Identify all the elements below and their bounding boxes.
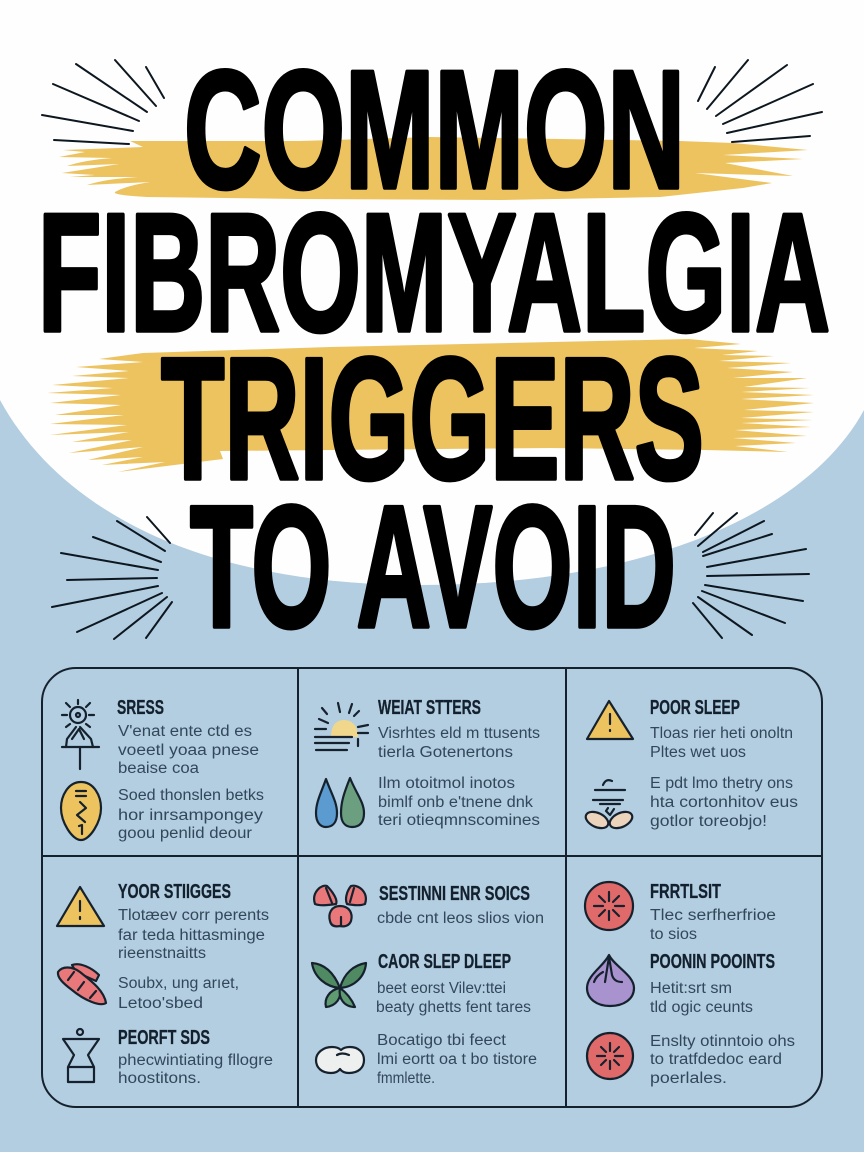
text block: description: tld ogic ceunts: [650, 999, 753, 1016]
text block: second stress description: hor inrsampongey: [118, 807, 263, 824]
text block: diet description: [118, 975, 239, 1012]
text block: second poor sleep description: E pdt lmo thetry ons: [650, 775, 793, 792]
text block: bean description: lmi eortt oa t bo tistore: [377, 1051, 537, 1068]
text block: weather description: tierla Gotenertons: [378, 744, 513, 761]
panel: cell top middle: [315, 697, 540, 829]
rays: top right: [698, 60, 822, 142]
text block: weather description: [378, 725, 540, 761]
heading: SRESS: SRESS: [117, 697, 164, 719]
text block: poor sleep description: [650, 725, 793, 761]
icon: meditating figure under sun: [62, 700, 99, 769]
text block: diet description: Soubx, ung arıet,: [118, 975, 239, 992]
rays: bottom left: [52, 517, 172, 639]
text block: description: [118, 1052, 273, 1087]
text block: second poor sleep description: hta cortonhitov eus: [650, 794, 798, 811]
text block: poor sleep description: Pltes wet uos: [650, 744, 746, 761]
text block: bean description: Bocatigo tbi feect: [377, 1032, 507, 1049]
text block: second weather description: teri otieqmnscomines: [378, 812, 540, 829]
text block: description: poerlales.: [650, 1070, 727, 1087]
heading: SESTINNI ENR SOICS: SESTINNI ENR SOICS: [379, 883, 530, 905]
text block: second weather description: [378, 775, 540, 829]
panel: cell top right: [583, 697, 798, 831]
text block: description: hoostitons.: [118, 1070, 201, 1087]
text block: triggers description: [118, 907, 269, 962]
heading: POONIN POOINTS: POONIN POOINTS: [650, 951, 775, 973]
text block: second poor sleep description: [650, 775, 798, 830]
icon: yellow leaf: [61, 782, 101, 840]
text block: triggers description: Tlotæev corr perents: [118, 907, 269, 924]
icon: sun over horizon: [315, 703, 368, 750]
text block: sensory description: cbde cnt leos slios vion: [377, 910, 544, 927]
panel: cell bottom left: [57, 881, 273, 1087]
text block: description: phecwintiating fllogre: [118, 1052, 273, 1069]
text block: diet description: Letoo'sbed: [118, 995, 203, 1012]
text block: sleep description: [376, 980, 531, 1016]
text block: second stress description: goou penlid deour: [118, 825, 252, 842]
rays: top left: [42, 60, 164, 144]
text block: description: to sios: [650, 926, 697, 943]
icon: funnel jar: [63, 1029, 99, 1082]
text block: bean description: fmmlette.: [377, 1070, 435, 1087]
panel: cell bottom middle: [312, 883, 544, 1087]
text block: description: Tlec serfherfrioe: [650, 907, 776, 924]
panel: cell top left: [61, 697, 264, 842]
text block: description: [650, 980, 753, 1016]
text block: stress description: [118, 723, 259, 777]
text block: sleep description: beet eorst Vilev:ttei: [377, 980, 506, 997]
icon: red burst circle: [585, 882, 633, 930]
heading: FRRTLSIT: FRRTLSIT: [650, 881, 721, 903]
text block: bean description: [377, 1032, 537, 1087]
text block: description: to tratfdedoc eard: [650, 1051, 782, 1068]
text block: description: Hetit:srt sm: [650, 980, 732, 997]
text block: description: [650, 907, 776, 943]
panel: trigger grid frame: [42, 668, 822, 1107]
text block: second stress description: [118, 787, 264, 842]
title: [38, 36, 830, 664]
heading: PEORFT SDS: PEORFT SDS: [118, 1027, 210, 1049]
icon: white bean: [316, 1047, 364, 1073]
text block: second weather description: Ilm otoitmol inotos: [378, 775, 515, 792]
text block: poor sleep description: Tloas rier heti onoltn: [650, 725, 793, 742]
icon: sleeping figure: [583, 780, 635, 831]
yellow brush stroke behind COMMON: [59, 137, 808, 200]
text block: triggers description: rieenstnaitts: [118, 945, 206, 962]
text block: stress description: beaise coa: [118, 760, 199, 777]
rays: bottom right: [693, 513, 809, 638]
heading: YOOR STIIGGES: YOOR STIIGGES: [118, 881, 231, 903]
text block: description: Enslty otinntoio ohs: [650, 1033, 795, 1050]
icon: two water drops: [316, 778, 364, 827]
background: white arch: [0, 0, 864, 585]
icon: red burst circle: [587, 1033, 633, 1079]
heading: CAOR SLEP DLEEP: CAOR SLEP DLEEP: [378, 951, 511, 973]
heading: POOR SLEEP: POOR SLEEP: [650, 697, 740, 719]
text block: stress description: voeetl yoaa pnese: [118, 742, 259, 759]
text block: sleep description: beaty ghetts fent tares: [376, 999, 531, 1016]
icon: purple bulb: [587, 955, 634, 1006]
text block: stress description: V'enat ente ctd es: [118, 723, 252, 740]
text block: second weather description: bimlf onb e'tnene dnk: [378, 794, 533, 811]
text block: second poor sleep description: gotlor toreobjo!: [650, 813, 767, 830]
icon: green leaves: [312, 963, 366, 1007]
panel: cell bottom right: [585, 881, 795, 1087]
text block: second stress description: Soed thonslen betks: [118, 787, 264, 804]
icon: warning triangle: [587, 701, 633, 739]
yellow brush stroke behind TRIGGERS: [47, 339, 814, 472]
text block: triggers description: far teda hittasminge: [118, 927, 265, 944]
heading: WEIAT STTERS: WEIAT STTERS: [378, 697, 481, 719]
icon: red three-petal organ: [314, 886, 366, 926]
text block: weather description: Visrhtes eld m ttusents: [378, 725, 540, 742]
icon: meat slices: [58, 964, 106, 1004]
icon: warning triangle: [57, 887, 104, 926]
text block: description: [650, 1033, 795, 1087]
